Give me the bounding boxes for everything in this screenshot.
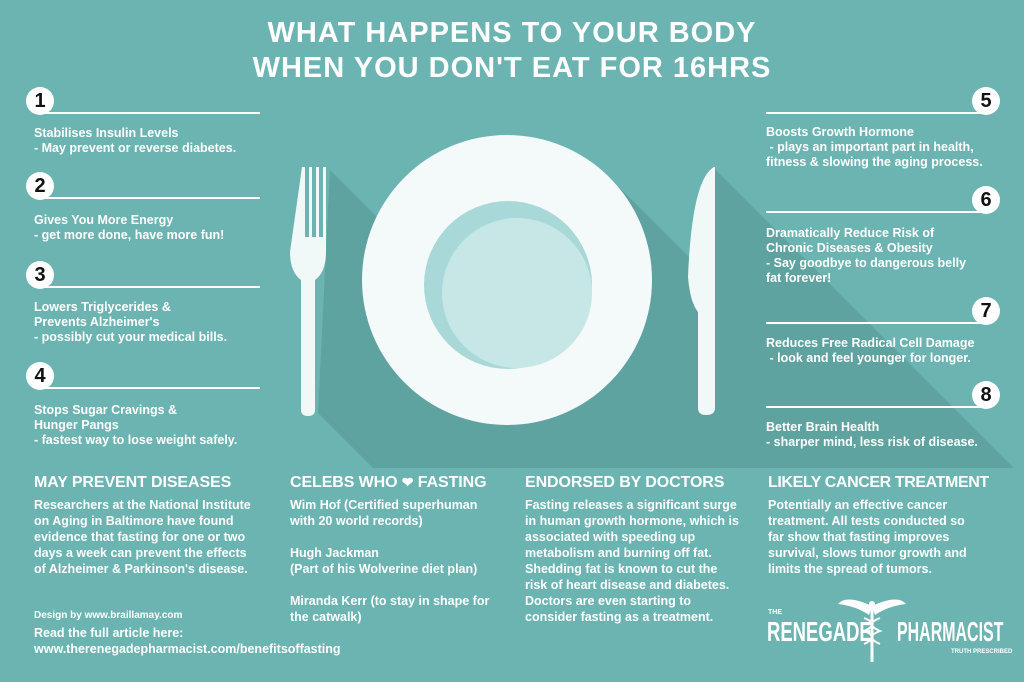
section: celebs: Miranda Kerr (to stay in shape for	[290, 594, 489, 608]
section: endorsed by doctors: in human growth hormone, which is	[525, 514, 739, 528]
section: endorsed by doctors: metabolism and burning off fat.	[525, 546, 712, 560]
section: endorsed by doctors: Doctors are even starting to	[525, 594, 691, 608]
title	[252, 17, 771, 84]
section: cancer treatment: far show that fasting improves	[768, 530, 949, 544]
section: may prevent diseases: of Alzheimer & Parkinson's disease.	[34, 562, 248, 576]
credits: www.therenegadepharmacist.com/benefitsoffasting	[34, 642, 341, 656]
section: cancer treatment: treatment. All tests conducted so	[768, 514, 965, 528]
section: endorsed by doctors: Fasting releases a significant surge	[525, 498, 737, 512]
left benefits list: Stops Sugar Cravings &	[34, 403, 177, 417]
left benefits list: Hunger Pangs	[34, 418, 119, 432]
section: celebs: the catwalk)	[290, 610, 362, 624]
section: endorsed by doctors: associated with speeding up	[525, 530, 695, 544]
left benefits list: 3	[34, 264, 46, 286]
right benefits list: Chronic Diseases & Obesity	[766, 241, 933, 255]
section: may prevent diseases: MAY PREVENT DISEASES	[34, 474, 231, 491]
left benefits list	[26, 87, 260, 447]
right benefits list: - look and feel younger for longer.	[769, 351, 971, 365]
left benefits list: 2	[34, 175, 46, 197]
section: cancer treatment: Potentially an effective cancer	[768, 498, 947, 512]
right benefits list: - sharper mind, less risk of disease.	[766, 435, 978, 449]
right benefits list: 8	[980, 384, 992, 406]
plate	[362, 135, 652, 425]
left benefits list: 1	[34, 90, 46, 112]
right benefits list: Reduces Free Radical Cell Damage	[766, 336, 974, 350]
left benefits list: - get more done, have more fun!	[34, 228, 224, 242]
section: cancer treatment: limits the spread of tumors.	[768, 562, 932, 576]
section: celebs: with 20 world records)	[290, 514, 423, 528]
left benefits list: 4	[34, 365, 46, 387]
left benefits list: - possibly cut your medical bills.	[34, 330, 227, 344]
right benefits list: Boosts Growth Hormone	[766, 125, 914, 139]
section: may prevent diseases: evidence that fasting for one or two	[34, 530, 245, 544]
left benefits list: Stabilises Insulin Levels	[34, 126, 179, 140]
left benefits list: Gives You More Energy	[34, 213, 173, 227]
section: celebs: Hugh Jackman	[290, 546, 379, 560]
item 1	[26, 87, 260, 155]
item 5	[766, 87, 1000, 169]
section: endorsed by doctors: ENDORSED BY DOCTORS	[525, 474, 724, 491]
logo: renegade pharmacist: TRUTH PRESCRIBED	[951, 649, 1012, 655]
section: celebs: CELEBS WHO ❤ FASTING	[290, 474, 486, 491]
left benefits list: Prevents Alzheimer's	[34, 315, 159, 329]
section: may prevent diseases	[34, 474, 251, 576]
icon: caduceus	[838, 600, 906, 662]
right benefits list	[766, 87, 1000, 449]
section: cancer treatment: survival, slows tumor growth and	[768, 546, 967, 560]
right benefits list: fitness & slowing the aging process.	[766, 155, 983, 169]
title: WHEN YOU DON'T EAT FOR 16HRS	[253, 52, 771, 84]
title: WHAT HAPPENS TO YOUR BODY	[267, 17, 757, 49]
left benefits list: Lowers Triglycerides &	[34, 300, 171, 314]
logo: renegade pharmacist: PHARMACIST	[897, 616, 1003, 647]
section: celebs: Wim Hof (Certified superhuman	[290, 498, 477, 512]
section: may prevent diseases: Researchers at the National Institute	[34, 498, 251, 512]
section: endorsed by doctors: risk of heart disease and diabetes.	[525, 578, 729, 592]
right benefits list: 6	[980, 189, 992, 211]
right benefits list: Better Brain Health	[766, 420, 879, 434]
right benefits list: 7	[980, 300, 992, 322]
credits: Read the full article here:	[34, 626, 183, 640]
item 7	[766, 297, 1000, 365]
right benefits list: fat forever!	[766, 271, 831, 285]
item 8	[766, 381, 1000, 449]
right benefits list: - Say goodbye to dangerous belly	[766, 256, 966, 270]
section: endorsed by doctors: consider fasting as a treatment.	[525, 610, 713, 624]
section: may prevent diseases: days a week can prevent the effects	[34, 546, 247, 560]
plate and cutlery illustration	[290, 135, 1014, 468]
logo: renegade pharmacist: THE	[768, 609, 782, 616]
section: celebs	[290, 474, 490, 624]
item 4	[26, 362, 260, 447]
credits	[34, 610, 341, 656]
section: cancer treatment	[768, 474, 989, 576]
item 6	[766, 186, 1000, 285]
logo: renegade pharmacist	[767, 600, 1012, 662]
fork	[290, 167, 326, 416]
logo: renegade pharmacist: RENEGADE	[767, 616, 872, 647]
left benefits list: - May prevent or reverse diabetes.	[34, 141, 236, 155]
credits: Design by www.braillamay.com	[34, 610, 182, 621]
right benefits list: Dramatically Reduce Risk of	[766, 226, 934, 240]
section: endorsed by doctors	[525, 474, 739, 624]
item 3	[26, 261, 260, 344]
item 2	[26, 172, 260, 242]
right benefits list: - plays an important part in health,	[769, 140, 974, 154]
left benefits list: - fastest way to lose weight safely.	[34, 433, 237, 447]
right benefits list: 5	[980, 90, 992, 112]
section: endorsed by doctors: Shedding fat is known to cut the	[525, 562, 717, 576]
section: cancer treatment: LIKELY CANCER TREATMENT	[768, 474, 989, 491]
knife	[688, 167, 715, 415]
section: may prevent diseases: on Aging in Baltimore have found	[34, 514, 234, 528]
section: celebs: (Part of his Wolverine diet plan)	[290, 562, 477, 576]
